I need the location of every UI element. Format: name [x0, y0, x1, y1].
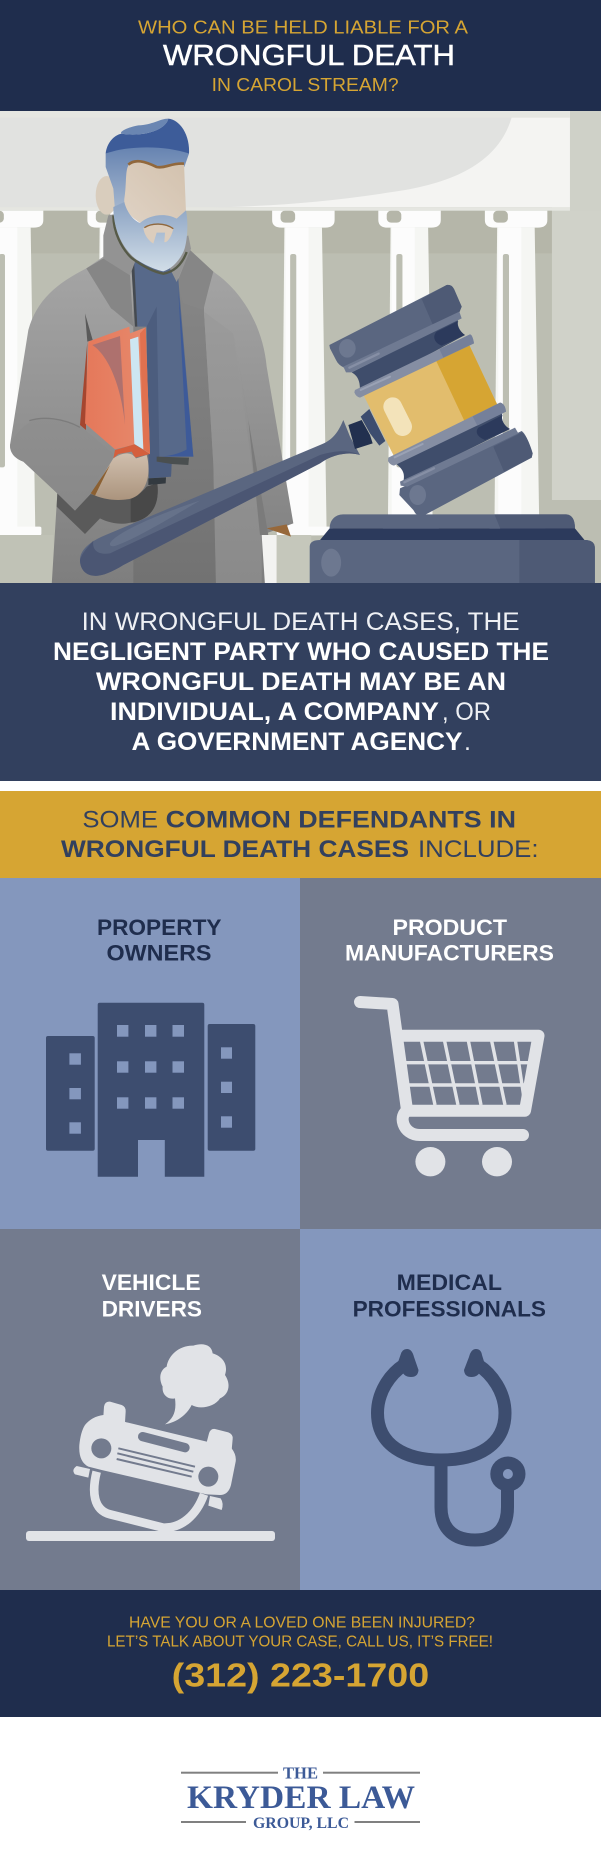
heading line 1: COMMON DEFENDANTS IN — [166, 806, 516, 833]
heading line: wrongful death: WRONGFUL DEATH — [163, 40, 455, 72]
panel: product manufacturers — [300, 878, 601, 1229]
panel: intro statement — [0, 583, 601, 781]
courthouse background — [0, 111, 601, 584]
heading line: who can be held liable: WHO CAN BE HELD LIABLE FOR A — [138, 16, 469, 37]
icon: overturned car with smoke — [73, 1344, 236, 1528]
icon: shopping cart — [360, 1002, 538, 1176]
label: product manufacturers: MANUFACTURERS — [345, 941, 554, 966]
panel: call to action — [0, 1590, 601, 1717]
text: let's talk about your case: LET’S TALK ABOUT YOUR CASE, CALL US, IT’S FREE! — [107, 1634, 493, 1651]
label: property owners: OWNERS — [106, 941, 212, 966]
heading line: in carol stream: IN CAROL STREAM? — [212, 74, 399, 95]
label: medical professionals: PROFESSIONALS — [353, 1297, 546, 1322]
panel: header — [0, 0, 601, 111]
panel: vehicle drivers — [0, 1229, 300, 1590]
panel: medical professionals — [300, 1229, 601, 1590]
label: vehicle drivers — [102, 1270, 202, 1322]
icon: gavel head — [329, 285, 533, 517]
figure: head with hair and beard — [96, 119, 191, 282]
label: vehicle drivers: DRIVERS — [102, 1297, 202, 1322]
heading line 2 — [61, 836, 538, 863]
icon: buildings — [46, 1003, 255, 1177]
text: a government agency: A GOVERNMENT AGENCY — [132, 728, 463, 756]
logo: The Kryder Law Group, LLC: GROUP, LLC — [253, 1815, 349, 1832]
text: have you or a loved one been injured: HAVE YOU OR A LOVED ONE BEEN INJURED? — [129, 1614, 475, 1631]
panel: section heading — [0, 791, 601, 878]
hero illustration: courthouse, lawyer and gavel — [0, 111, 601, 585]
icon: gavel sound block — [310, 514, 595, 584]
text: negligent party: NEGLIGENT PARTY WHO CAUSED THE — [53, 638, 549, 666]
heading line 1: SOME — [82, 806, 158, 833]
text: in wrongful death cases: IN WRONGFUL DEATH CASES, THE — [82, 608, 520, 636]
icon: gavel handle — [80, 420, 360, 576]
label: product manufacturers: PRODUCT — [392, 915, 508, 940]
logo: The Kryder Law Group, LLC: THE — [283, 1764, 318, 1783]
label: vehicle drivers: VEHICLE — [102, 1270, 201, 1295]
logo: The Kryder Law Group, LLC — [181, 1764, 420, 1832]
text: individual, a company, or: INDIVIDUAL, A COMPANY — [110, 698, 439, 726]
label: medical professionals — [353, 1270, 546, 1322]
phone number: (312) 223-1700 — [172, 1658, 429, 1695]
label: product manufacturers — [345, 915, 554, 966]
icon: road surface — [26, 1531, 275, 1541]
heading line 2: WRONGFUL DEATH CASES — [61, 836, 409, 863]
label: property owners — [97, 915, 222, 966]
icon: stethoscope — [378, 1349, 526, 1540]
heading line 2: INCLUDE: — [418, 836, 538, 863]
panel: property owners — [0, 878, 300, 1229]
text: wrongful death may be an: WRONGFUL DEATH MAY BE AN — [96, 668, 506, 696]
logo: The Kryder Law Group, LLC: KRYDER LAW — [187, 1780, 415, 1816]
text: a government agency: . — [464, 728, 471, 756]
label: medical professionals: MEDICAL — [397, 1270, 502, 1295]
text: individual, a company, or: , OR — [442, 698, 491, 726]
label: property owners: PROPERTY — [97, 915, 222, 940]
figure: coat, scarf and books — [10, 250, 293, 585]
